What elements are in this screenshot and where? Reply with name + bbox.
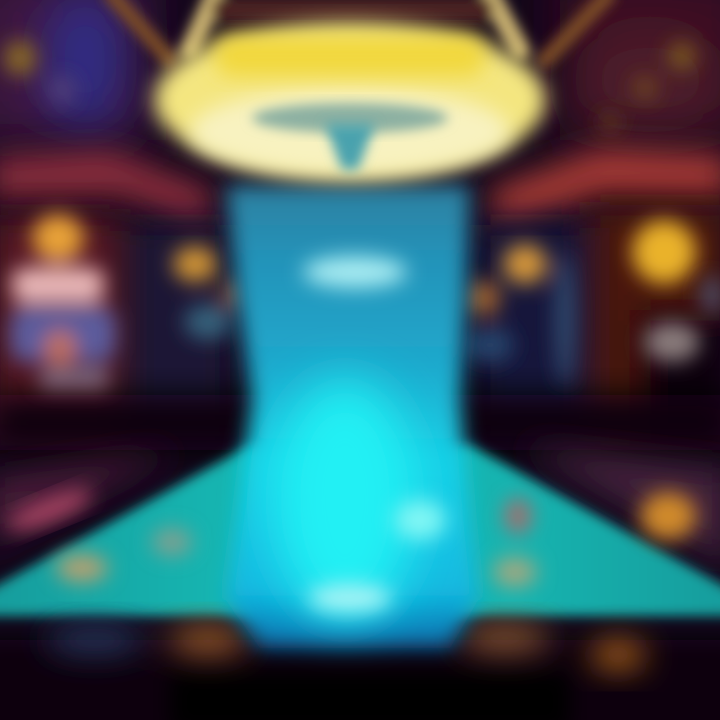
chandelier lower band [190,88,510,176]
right figure [644,275,720,362]
chandelier struts [112,0,608,60]
table edge glows [45,624,646,669]
right lamp [632,220,696,284]
red right banner [490,148,720,228]
bottom dark band [0,640,720,720]
bottom centre shadow [170,672,570,720]
side lamps and chips [173,244,575,386]
dark floor shadow [0,395,720,450]
teal table [0,445,720,616]
chips on table [56,492,696,587]
red left banner [0,150,215,228]
upper right wall [560,0,720,140]
carpet highlight [3,482,97,538]
water bright core [273,380,417,620]
chandelier ring [154,22,546,178]
central water column [226,185,478,648]
upper left wall [0,0,150,140]
right machine column [480,205,720,435]
ceiling lights [4,40,696,132]
water glow highlights [303,256,446,612]
carpet right [520,445,720,565]
left machine column [0,215,230,435]
chandelier inner disc [252,103,448,133]
carpet left [0,450,180,555]
chandelier stem [325,124,375,170]
chandelier glow [154,22,546,178]
chandelier top band [215,36,485,76]
left figure [10,214,116,388]
